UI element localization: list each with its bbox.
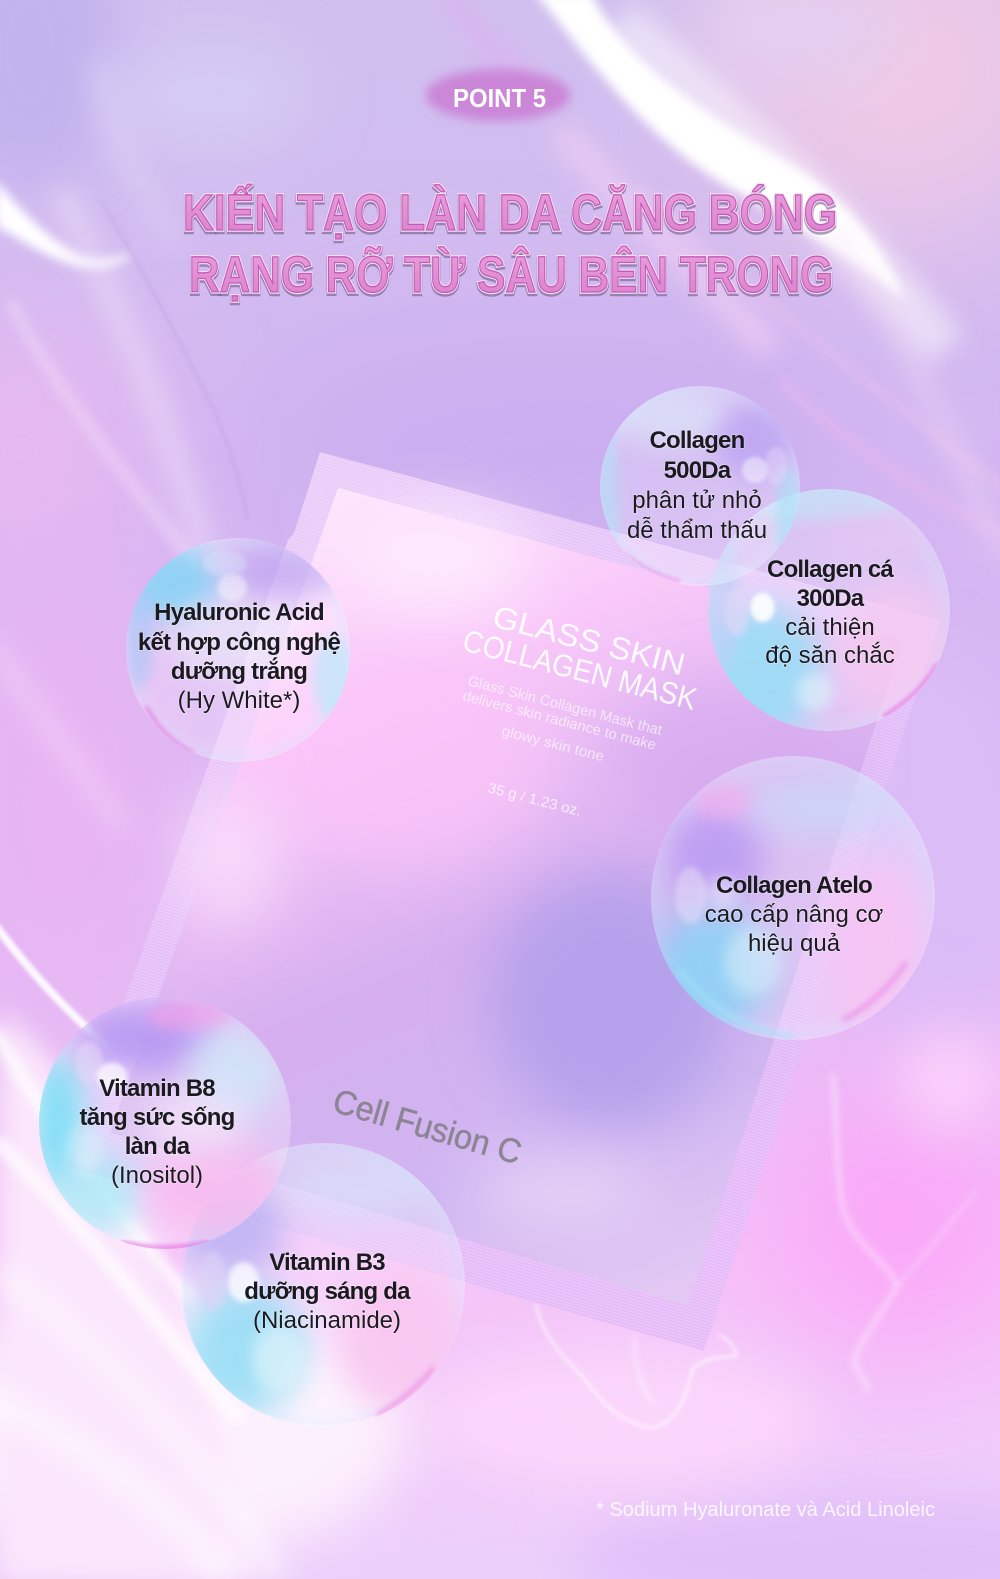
- text: Collagen Atelo: hiệu quả: [748, 930, 841, 957]
- mask brand: Cell Fusion C: Cell Fusion C: [329, 1082, 526, 1172]
- title: two lines: RẠNG RỠ TỪ SÂU BÊN TRONG: [189, 245, 833, 303]
- bubble: Hyaluronic Acid: [126, 538, 353, 762]
- mask label text: glowy skin tone: [500, 723, 606, 765]
- text: Collagen cá 300Da: độ săn chắc: [765, 642, 895, 669]
- text: Hyaluronic Acid: (Hy White*): [178, 687, 300, 714]
- product: sheet mask pouch: [66, 452, 940, 1351]
- pill badge: POINT 5: POINT 5: [453, 83, 546, 113]
- pill badge: POINT 5: [426, 69, 570, 121]
- lower left white streaks: [0, 922, 109, 1050]
- text: Vitamin B8: Vitamin B8: [99, 1075, 215, 1102]
- text: Vitamin B3: Vitamin B3: [269, 1249, 385, 1276]
- bubble: Collagen Atelo: [651, 756, 935, 1040]
- title: two lines: KIẾN TẠO LÀN DA CĂNG BÓNG: [183, 183, 837, 241]
- title: two lines: KIẾN TẠO LÀN DA CĂNG BÓNG: [183, 183, 837, 241]
- title: two lines: RẠNG RỠ TỪ SÂU BÊN TRONG: [189, 247, 833, 305]
- mask label text: Glass Skin Collagen Mask that: [466, 673, 664, 739]
- bubble: Collagen 500Da: [596, 386, 800, 586]
- mask label text: 35 g / 1.23 oz.: [486, 780, 583, 820]
- text: Hyaluronic Acid: kết hợp công nghệ: [138, 629, 341, 656]
- text: Vitamin B8: tăng sức sống: [80, 1104, 235, 1131]
- title: two lines: [183, 183, 837, 305]
- mask label text: [459, 599, 701, 820]
- wisps under the mask: [536, 1305, 736, 1428]
- bubble: Vitamin B8: [30, 997, 291, 1249]
- text: Vitamin B3: dưỡng sáng da: [244, 1278, 411, 1305]
- text: Vitamin B8: (Inositol): [111, 1162, 203, 1189]
- title: two lines: RẠNG RỠ TỪ SÂU BÊN TRONG: [189, 245, 833, 303]
- text: Collagen 500Da: 500Da: [664, 457, 732, 484]
- text: Hyaluronic Acid: Hyaluronic Acid: [154, 599, 324, 626]
- mask label text: COLLAGEN MASK: [459, 623, 701, 717]
- title: two lines: KIẾN TẠO LÀN DA CĂNG BÓNG: [183, 185, 837, 243]
- mask label text: GLASS SKIN: [489, 599, 689, 682]
- left film glare and fold lines: [0, 180, 135, 269]
- text: Collagen cá 300Da: 300Da: [797, 585, 865, 612]
- text: Collagen cá 300Da: Collagen cá: [767, 556, 894, 583]
- text: Collagen Atelo: Collagen Atelo: [716, 872, 872, 899]
- bubble: Vitamin B3: [177, 1143, 465, 1427]
- text: Hyaluronic Acid: dưỡng trắng: [171, 657, 307, 685]
- text: Vitamin B3: (Niacinamide): [253, 1307, 401, 1334]
- text: Collagen cá 300Da: cải thiện: [785, 614, 875, 641]
- mask label text: delivers skin radiance to make: [461, 688, 658, 754]
- text: Collagen 500Da: phân tử nhỏ: [632, 487, 762, 514]
- top right white streak: [535, 0, 905, 300]
- bubble: Collagen cá 300Da: [701, 482, 950, 737]
- footnote: * Sodium Hyaluronate và Acid Linoleic: [596, 1499, 935, 1521]
- text: Collagen 500Da: Collagen: [650, 427, 745, 454]
- text: Collagen 500Da: dễ thẩm thấu: [627, 517, 767, 544]
- text: Vitamin B8: làn da: [125, 1133, 191, 1160]
- text: Collagen Atelo: cao cấp nâng cơ: [705, 901, 884, 928]
